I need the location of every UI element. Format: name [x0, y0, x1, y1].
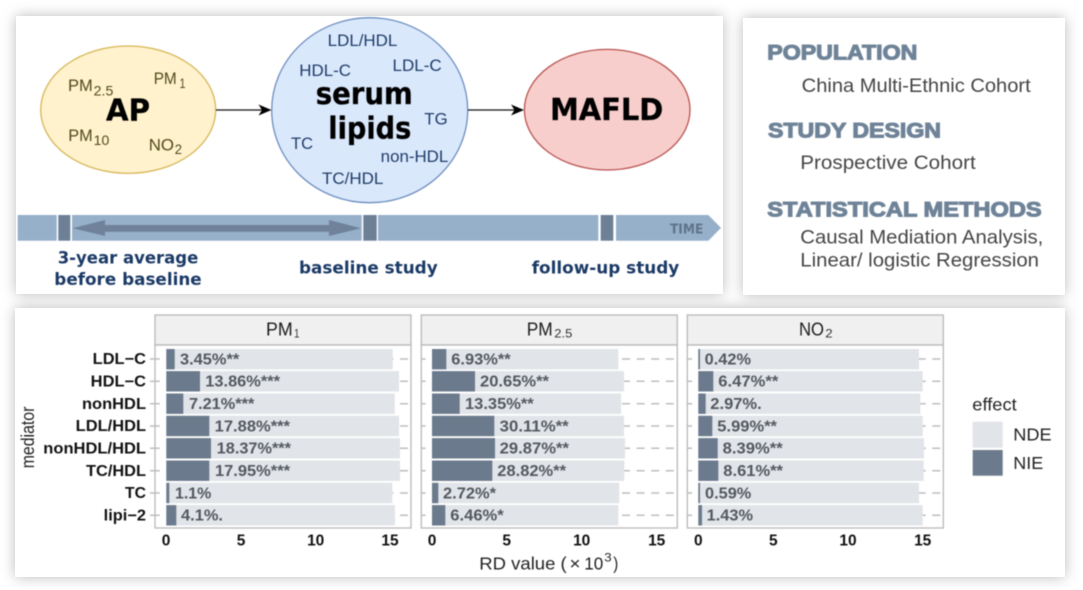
bars: NO2 NDE	[698, 349, 924, 526]
facet strip: NO2	[687, 315, 943, 345]
node: serum lipids: TG	[424, 110, 448, 128]
node: AP air pollution: NO	[149, 136, 174, 155]
node: serum lipids: LDL/HDL	[328, 32, 397, 50]
facet strip: NO2: 2	[825, 326, 833, 340]
value labels: PM2.5: 6.93%**	[451, 351, 511, 368]
axis title: RD value: RD value (	[479, 553, 567, 573]
x axis labels: PM2.5: 15	[648, 533, 666, 550]
timeline bar	[18, 215, 721, 241]
label: 3-year average before baseline: 3-year average	[58, 248, 198, 268]
value labels: PM1	[175, 351, 292, 525]
value labels: PM2.5: 13.35%**	[465, 396, 534, 413]
text: Prospective Cohort: Prospective Cohort	[800, 152, 976, 174]
facet strip: PM1	[155, 315, 411, 345]
value labels: PM1: 17.88%***	[215, 418, 291, 435]
text: statistical methods list: Causal Mediation Analysis,	[800, 226, 1043, 248]
axis title: RD value: 3	[604, 551, 612, 565]
node: AP air pollution: PM	[154, 69, 177, 88]
x axis labels: PM2.5: 5	[502, 533, 511, 550]
value labels: NO2: 6.47%**	[718, 374, 779, 391]
node: MAFLD: MAFLD	[550, 93, 663, 128]
y axis labels: nonHDL/HDL	[43, 440, 146, 458]
y axis labels: lipi−2	[104, 508, 146, 524]
node: AP air pollution: 2.5	[94, 83, 114, 99]
value labels: NO2: 5.99%**	[717, 418, 778, 435]
label: baseline study: baseline study	[299, 258, 438, 278]
facet strip: PM2.5: PM	[527, 320, 553, 340]
node: serum lipids: non-HDL	[381, 148, 448, 166]
facet strip: NO2: NO	[799, 320, 824, 340]
value labels: NO2: 8.61%**	[723, 463, 784, 480]
value labels: NO2: 8.39%**	[723, 441, 783, 458]
axis title: RD value	[479, 551, 618, 573]
axis title: RD value: ×	[570, 553, 580, 573]
arrow: AP to serum lipids	[216, 104, 272, 116]
node: AP air pollution: 10	[94, 132, 110, 148]
node: serum lipids: TC	[291, 135, 313, 153]
y axis labels: HDL−C	[91, 374, 146, 390]
value labels: NO2	[705, 351, 784, 525]
facet strip: PM1: 1	[294, 326, 300, 340]
node: AP air pollution: PM	[68, 126, 93, 145]
x axis labels: NO2	[694, 533, 932, 550]
x axis labels: PM1: 0	[162, 533, 170, 550]
facet strip: PM1: PM	[266, 320, 293, 340]
text: statistical methods list	[800, 226, 1043, 272]
bars: PM1 NDE	[166, 349, 400, 526]
text: China Multi-Ethnic Cohort: China Multi-Ethnic Cohort	[802, 75, 1031, 97]
axis title: RD value: )	[613, 553, 618, 573]
node: AP air pollution	[41, 46, 216, 173]
y axis labels: nonHDL	[82, 396, 146, 413]
x axis labels: PM1: 15	[381, 533, 399, 550]
bars: NO2 NIE	[698, 349, 718, 526]
node: AP air pollution: 2	[175, 141, 182, 157]
card: study pathway	[16, 16, 723, 294]
value labels: PM2.5: 2.72%*	[443, 485, 497, 502]
label: 3-year average before baseline: before baseline	[54, 270, 202, 290]
panel: study information	[767, 40, 1043, 272]
x axis labels: PM2.5: 10	[573, 533, 590, 550]
y axis labels: TC/HDL	[86, 463, 146, 480]
value labels: PM2.5: 6.46%*	[450, 508, 505, 525]
value labels: PM2.5	[443, 351, 570, 525]
label: 3-year average before baseline	[54, 248, 202, 290]
node: serum lipids: lipids	[328, 112, 411, 146]
bars: PM2.5 NIE	[432, 349, 495, 526]
axis title: RD value: 10	[584, 553, 604, 573]
x axis labels: PM1	[162, 533, 399, 550]
x axis labels: NO2: 0	[694, 533, 703, 550]
label: TIME: TIME	[670, 221, 703, 237]
value labels: PM1: 17.95%***	[215, 463, 291, 480]
legend key: NIE: NIE	[1013, 453, 1043, 473]
value labels: PM1: 18.37%***	[217, 441, 292, 458]
value labels: PM1: 13.86%***	[205, 374, 281, 391]
text: statistical methods list: Linear/ logistic Regression	[800, 250, 1039, 272]
card: mediation results chart	[15, 308, 1065, 577]
value labels: PM2.5: 30.11%**	[500, 418, 570, 435]
legend key: NDE: NDE	[1013, 425, 1052, 445]
facet: PM1	[150, 315, 411, 550]
value labels: NO2: 0.42%	[705, 351, 751, 368]
x axis labels: PM1: 10	[307, 533, 324, 550]
node: AP air pollution: 1	[180, 75, 186, 91]
arrow: 3-year exposure window	[73, 220, 361, 236]
value labels: NO2: 2.97%.	[710, 396, 762, 413]
panel: study pathway diagram	[18, 18, 721, 290]
card: study information	[743, 18, 1065, 295]
node: serum lipids: LDL-C	[392, 57, 442, 75]
node: serum lipids: serum	[316, 77, 413, 112]
x axis labels: PM2.5	[428, 533, 666, 550]
heading: statistical methods: STATISTICAL METHODS	[767, 198, 1042, 222]
x axis labels: PM1: 5	[237, 533, 246, 550]
facet: PM2.5	[421, 315, 677, 550]
y axis labels	[43, 351, 146, 524]
legend: effect	[972, 395, 1052, 476]
x axis labels: NO2: 15	[914, 533, 932, 550]
value labels: PM1: 7.21%***	[189, 396, 255, 413]
value labels: PM2.5: 28.82%**	[497, 463, 567, 480]
node: AP air pollution: AP	[106, 94, 150, 129]
value labels: PM2.5: 29.87%**	[500, 441, 570, 458]
bars: PM2.5 NDE	[432, 349, 625, 526]
x axis labels: NO2: 10	[839, 533, 857, 550]
facet strip: PM2.5: 2.5	[554, 326, 573, 340]
facet strip: PM2.5	[421, 315, 677, 345]
value labels: NO2: 0.59%	[705, 485, 751, 502]
y axis labels: TC	[125, 485, 146, 502]
x axis labels: NO2: 5	[769, 533, 778, 550]
bars: PM1 NIE	[166, 349, 211, 526]
node: serum lipids	[272, 18, 468, 203]
node: AP air pollution: PM	[68, 76, 93, 95]
value labels: NO2: 1.43%	[707, 508, 753, 525]
panel: mediation bar chart	[18, 315, 1052, 573]
facet: NO2	[687, 315, 943, 550]
value labels: PM1: 1.1%	[175, 485, 211, 502]
heading: population: POPULATION	[767, 40, 917, 64]
heading: study design: STUDY DESIGN	[768, 119, 941, 143]
node: serum lipids: HDL-C	[299, 62, 351, 80]
legend: effect: effect	[972, 395, 1017, 415]
value labels: PM1: 4.1%.	[181, 508, 223, 525]
node: MAFLD	[524, 49, 690, 170]
axis title: mediator: mediator	[18, 407, 38, 468]
x axis labels: PM2.5: 0	[428, 533, 436, 550]
value labels: PM1: 3.45%**	[180, 351, 240, 368]
node: serum lipids: TC/HDL	[322, 170, 383, 188]
y axis labels: LDL−C	[93, 351, 146, 368]
arrow: serum lipids to MAFLD	[468, 104, 524, 116]
value labels: PM2.5: 20.65%**	[480, 374, 550, 391]
y axis labels: LDL/HDL	[76, 418, 146, 435]
label: follow-up study: follow-up study	[532, 258, 679, 278]
